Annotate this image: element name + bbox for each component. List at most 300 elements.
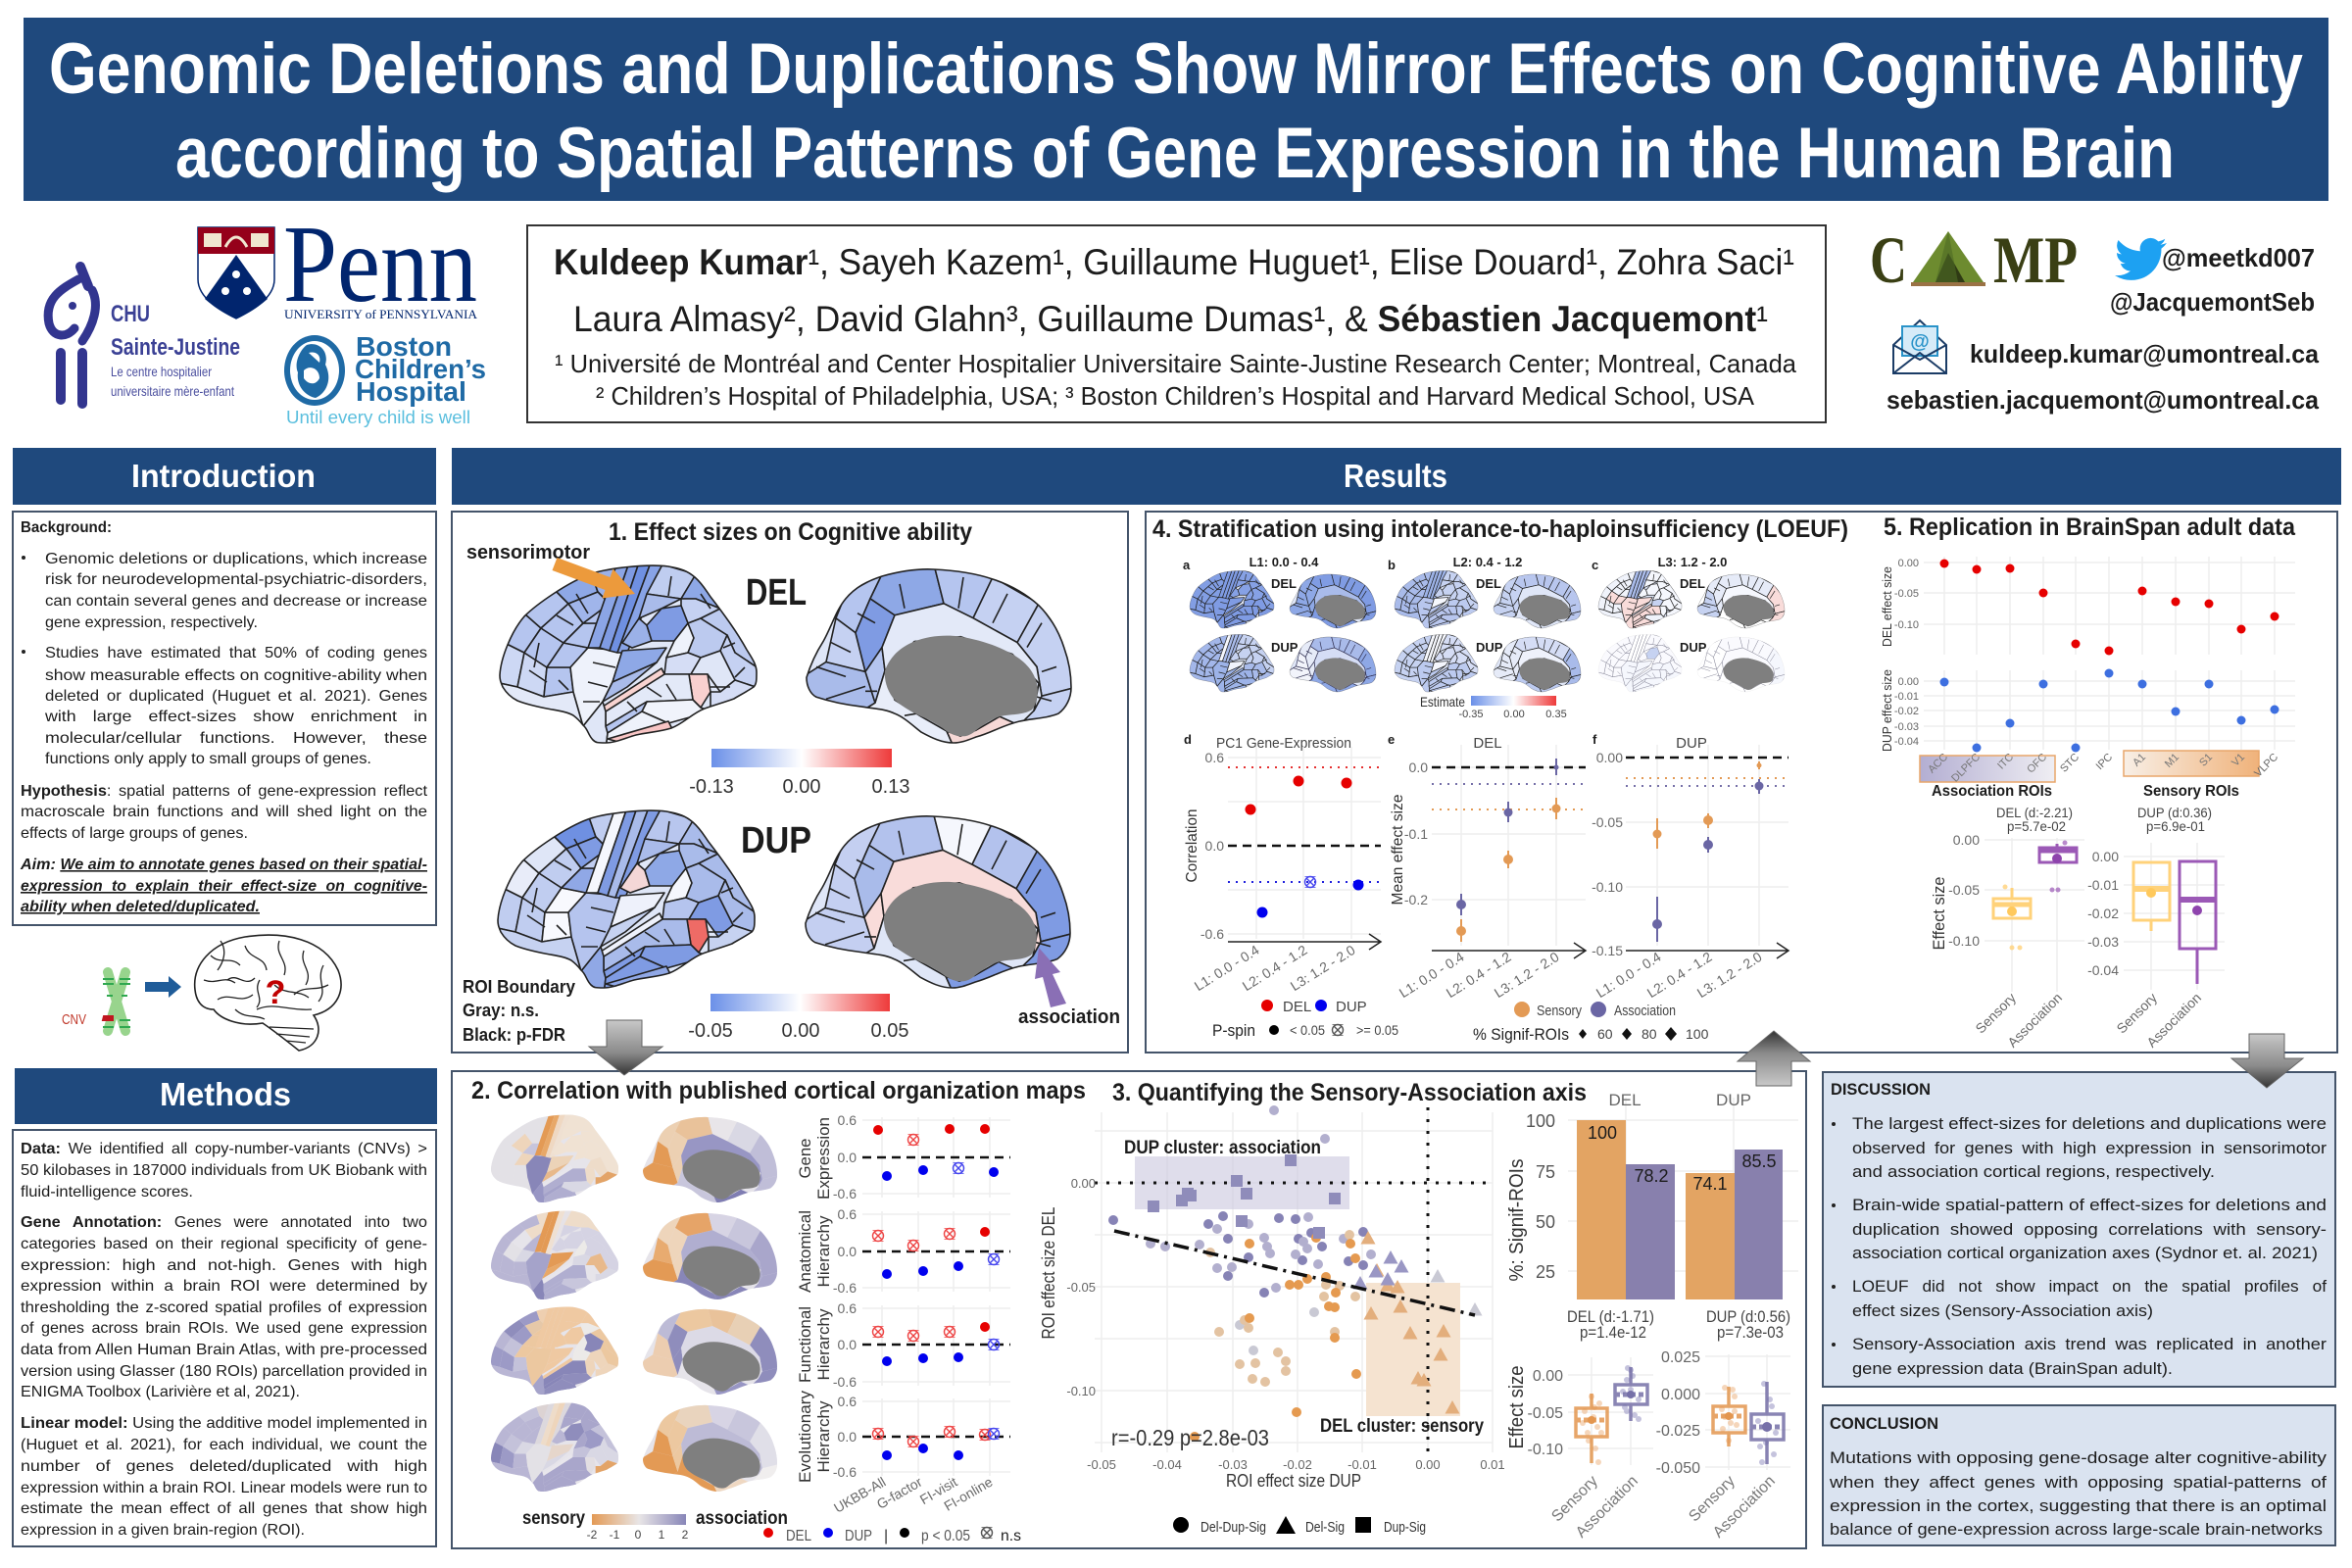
chart e: DEL mean effect: -0.2: [1404, 892, 1428, 907]
logo: Penn: UNIVERSITY of PENNSYLVANIA: [284, 307, 478, 321]
legend: Sensory/Association and % Signif-ROIs: [1473, 1002, 1709, 1044]
chart: anatomical hierarchy correlations: 0.0: [838, 1244, 857, 1259]
chart e: DEL mean effect: [1388, 732, 1586, 1001]
heading: Results: Results: [1344, 458, 1447, 494]
panel: conclusion: expression in the cortex, suggesting that there is an optimal: [1830, 1496, 2327, 1515]
arrow: panel 3 to panel 4: [1738, 1031, 1810, 1086]
legend: correlation charts: DEL: [786, 1528, 811, 1544]
chart d: PC1 gene-expression correlation: d: [1184, 732, 1192, 747]
colorbar: DEL: -0.13: [689, 776, 734, 798]
chart e: DEL mean effect: Mean effect size: [1390, 794, 1406, 906]
panel: introduction text: gene expression, respectively.: [45, 614, 258, 631]
chart f: DUP mean effect: -0.10: [1592, 879, 1623, 895]
brain grid: L3: c: [1592, 558, 1598, 572]
legend: Sensory/Association and % Signif-ROIs: Association: [1614, 1003, 1676, 1019]
chart f: DUP mean effect: L2: 0.4 - 1.2: [1644, 949, 1715, 1001]
x-axis: brain region labels: A1: [2131, 752, 2148, 769]
chart: functional hierarchy correlations: -0.6: [833, 1374, 857, 1390]
x-axis: brain region labels: ITC: [1995, 752, 2016, 772]
colorbar: DUP: [688, 994, 908, 1042]
panel: discussion: Brain-wide spatial-pattern of effect-sizes for deletions and: [1852, 1196, 2327, 1214]
boxplot: DEL sensory vs association: 0.00: [1533, 1368, 1563, 1385]
panel: introduction text: Studies have estimated that 50% of coding genes: [45, 645, 427, 662]
chart d: PC1 gene-expression correlation: Correlation: [1184, 809, 1200, 882]
bar chart: percent significant ROIs: 85.5: [1741, 1152, 1777, 1171]
highlight: Association ROIs: Association ROIs: [1932, 783, 2052, 800]
colorbar: Estimate: 0.35: [1545, 709, 1567, 720]
panel: methods text: expression in a given brain-region (ROI).: [21, 1522, 305, 1539]
chart f: DUP mean effect: [1592, 732, 1788, 1001]
chart: functional hierarchy correlations: Hierarchy: [814, 1308, 833, 1380]
legend: ROI boundary: Gray: n.s.: [463, 1001, 539, 1020]
boxplot: BrainSpan DUP: -0.04: [2087, 962, 2119, 978]
chart: anatomical hierarchy correlations: [796, 1206, 1010, 1296]
boxplot: BrainSpan DUP: -0.01: [2087, 877, 2119, 893]
icon: chromosome with CNV: [62, 972, 130, 1031]
panel: discussion: gene expression data (BrainSpan adult).: [1852, 1359, 2173, 1378]
colorbar: DUP: 0.05: [871, 1020, 908, 1042]
author box: Kuldeep Kumar¹, Sayeh Kazem¹, Guillaume Huguet¹, Elise Douard¹, Zohra Saci¹: [554, 242, 1794, 282]
chart: BrainSpan DUP effect size: -0.01: [1894, 691, 1919, 703]
boxplot: DEL sensory vs association: Effect size: [1506, 1366, 1528, 1448]
brain: DUP lateral: [493, 808, 762, 996]
icon: brain with question mark: ?: [266, 974, 285, 1011]
bar chart: percent significant ROIs: 74.1: [1692, 1174, 1728, 1194]
chart: BrainSpan DEL effect size: 0.00: [1898, 558, 1919, 569]
boxplot: BrainSpan DEL: Effect size: [1930, 876, 1948, 951]
panel: discussion: The largest effect-sizes for deletions and duplications were: [1852, 1114, 2327, 1133]
legend: point shapes: [1173, 1516, 1426, 1536]
axis labels: ROI effect size DUP: [1226, 1471, 1361, 1491]
chart: anatomical hierarchy correlations: Anatomical: [796, 1210, 814, 1293]
chart: BrainSpan DEL effect size: -0.05: [1894, 588, 1919, 600]
boxplot: DUP sensory vs association: 0.000: [1661, 1387, 1700, 1403]
chart: gene expression correlations: Expression: [814, 1117, 833, 1200]
x-axis: brain region labels: DLPFC: [1949, 752, 1983, 785]
cluster: DUP association: [1135, 1156, 1349, 1209]
heading: panel 5: 5. Replication in BrainSpan adult data: [1884, 514, 2296, 541]
panel: introduction text: risk for neurodevelopmental-psychiatric-disorders,: [45, 571, 427, 588]
panel: methods text: data from Allen Human Brain Atlas, with pre-processed: [21, 1342, 427, 1358]
points: light orange circles: [1205, 1230, 1360, 1387]
brain grid: L1: L1: 0.0 - 0.4: [1250, 555, 1319, 569]
legend: correlation charts: DUP: [845, 1528, 872, 1544]
brain grid: L1: DUP: [1271, 640, 1298, 655]
boxplot: DUP sensory vs association: DUP (d:0.56): [1706, 1307, 1790, 1326]
chart d: PC1 gene-expression correlation: [1184, 732, 1381, 994]
panel: conclusion: when they affect genes with opposing spatial-patterns of: [1829, 1473, 2327, 1492]
chart d: PC1 gene-expression correlation: PC1 Gene-Expression: [1216, 735, 1351, 752]
chart f: DUP mean effect: L1: 0.0 - 0.4: [1593, 949, 1664, 1001]
heading: panel 2: 2. Correlation with published cortical organization maps: [471, 1077, 1086, 1104]
legend: Sensory/Association and % Signif-ROIs: 60: [1597, 1026, 1613, 1042]
panel: introduction text: effects of large groups of genes.: [21, 825, 248, 842]
legend: Sensory/Association and % Signif-ROIs: 100: [1686, 1026, 1709, 1042]
author box: ² Children’s Hospital of Philadelphia, USA; ³ Boston Children’s Hospital and Harvard Medical School, USA: [596, 381, 1755, 411]
logo: CHU Sainte-Justine: [48, 267, 240, 404]
logo: Boston Children's Hospital: Boston: [356, 331, 452, 362]
bar chart: percent significant ROIs: 100: [1526, 1111, 1555, 1131]
boxplot: DEL sensory vs association: Sensory: [1548, 1473, 1601, 1525]
bar chart: percent significant ROIs: 100: [1588, 1123, 1617, 1143]
colorbar: DUP: 0.00: [782, 1020, 819, 1042]
boxplot: DUP sensory vs association: 0.025: [1661, 1349, 1700, 1366]
heading: Introduction: Introduction: [131, 458, 316, 494]
brain grid: L3: DUP: [1680, 640, 1707, 655]
boxplot: BrainSpan DEL: Sensory: [1972, 990, 2019, 1036]
heading: Methods: Methods: [160, 1076, 291, 1112]
legend: Sensory/Association and % Signif-ROIs: Sensory: [1537, 1003, 1582, 1019]
chart d: PC1 gene-expression correlation: L1: 0.0 - 0.4: [1192, 942, 1262, 994]
boxplot: BrainSpan DEL: Association: [2004, 990, 2065, 1051]
chart: evolutionary hierarchy correlations: UKBB-All: [831, 1474, 888, 1516]
boxplot: DUP sensory vs association: Association: [1710, 1473, 1779, 1542]
panel: methods text: (Huguet et al. 2021), for each individual, we count the: [21, 1437, 427, 1453]
panel: introduction text: Hypothesis: spatial patterns of gene-expression reflect: [21, 783, 428, 800]
legend: ROI boundary: Black: p-FDR: [463, 1025, 565, 1045]
panel: discussion: observed for genes with high expression in sensorimotor: [1852, 1139, 2327, 1157]
brain grid: L2: L2: 0.4 - 1.2: [1453, 555, 1522, 569]
axis labels: -0.03: [1218, 1457, 1248, 1472]
chart: BrainSpan DEL effect size: -0.10: [1894, 619, 1919, 631]
brains: functional hierarchy: [489, 1305, 780, 1398]
panel: introduction text: molecular/cellular functions. However, these: [45, 730, 427, 747]
points: orange circles: [1190, 1233, 1361, 1442]
x-axis: brain region labels: M1: [2163, 752, 2181, 770]
panel: introduction text: show measurable effects on cognitive-ability when: [45, 667, 427, 684]
panel: discussion: Sensory-Association axis trend was replicated in another: [1852, 1335, 2327, 1353]
panel: introduction text: Aim: We aim to annotate genes based on their spatial-: [20, 857, 427, 873]
legend: point shapes: Del-Dup-Sig: [1200, 1519, 1266, 1536]
axis labels: -0.02: [1283, 1457, 1312, 1472]
bar chart: percent significant ROIs: 25: [1536, 1262, 1555, 1282]
colorbar: Estimate: -0.35: [1458, 709, 1484, 720]
x-axis: brain region labels: IPC: [2094, 752, 2115, 772]
boxplot: DEL sensory vs association: [1506, 1307, 1654, 1542]
chart: evolutionary hierarchy correlations: FI-visit: [917, 1474, 960, 1507]
legend: correlation charts: p < 0.05: [921, 1528, 970, 1544]
boxplot: BrainSpan DEL: p=5.7e-02: [2007, 818, 2066, 834]
x-axis: brain region labels: STC: [2058, 752, 2082, 775]
panel: methods text: categories based on their regional specificity of gene-: [21, 1236, 427, 1252]
chart: gene expression correlations: [796, 1112, 1010, 1201]
legend: DEL/DUP and P-spin: >= 0.05: [1356, 1022, 1398, 1038]
label: sensorimotor: sensorimotor: [466, 542, 590, 564]
brains: gene expression: [489, 1113, 780, 1206]
x-axis: brain region labels: VLPC: [2252, 752, 2280, 779]
icon: envelope: @: [1910, 331, 1930, 353]
boxplot: BrainSpan DEL: -0.10: [1948, 933, 1980, 949]
points: purple triangles: [1352, 1250, 1409, 1290]
panel: methods text: Gene Annotation: Genes were annotated into two: [21, 1214, 427, 1231]
boxplot: BrainSpan DUP: DUP (d:0.36): [2137, 805, 2212, 820]
legend: sensory-association colorbar: [522, 1508, 788, 1542]
legend: sensory-association colorbar: -1: [610, 1528, 620, 1542]
brain: DEL lateral: [495, 563, 764, 751]
panel: introduction text: [13, 512, 436, 925]
boxplot: DEL sensory vs association: p=1.4e-12: [1580, 1323, 1646, 1342]
points: purple circles: [1108, 1211, 1368, 1298]
panel: introduction text: macroscale brain functions and will shed light on the: [21, 804, 427, 820]
brain grid: L1: a: [1183, 558, 1191, 572]
label: association: association: [1018, 1006, 1120, 1028]
colorbar: DUP: -0.05: [688, 1020, 733, 1042]
title banner: [24, 18, 2328, 201]
x-axis: brain region labels: V1: [2230, 752, 2247, 769]
boxplot: DUP sensory vs association: -0.050: [1656, 1460, 1700, 1477]
chart d: PC1 gene-expression correlation: 0.0: [1205, 838, 1224, 854]
chart d: PC1 gene-expression correlation: L3: 1.2 - 2.0: [1288, 942, 1358, 994]
label: DEL cluster: DEL cluster: sensory: [1320, 1416, 1484, 1437]
boxplot: BrainSpan DUP: Sensory: [2113, 990, 2160, 1036]
boxplot: DEL sensory vs association: -0.05: [1528, 1405, 1563, 1422]
highlight: Sensory ROIs: Sensory ROIs: [2143, 783, 2239, 800]
logo: CAMP tent: C: [1870, 222, 1907, 297]
panel: methods text: expression within a brain ROI. Linear models were run to: [21, 1480, 427, 1496]
panel: introduction text: expression to explain their effect-size on cognitive-: [21, 878, 427, 895]
arrow: CNV to brain: [145, 976, 181, 998]
panel: methods text: fluid-intelligence scores.: [21, 1184, 193, 1200]
panel: introduction text: deleted or duplicated (Huguet et al. 2021). Genes: [45, 688, 427, 705]
brains: evolutionary hierarchy: [489, 1401, 780, 1495]
legend: sensory-association colorbar: -2: [587, 1528, 598, 1542]
legend: DEL/DUP and P-spin: [1212, 999, 1398, 1040]
panel: discussion: and association cortical regions, respectively.: [1852, 1162, 2215, 1181]
boxplot: BrainSpan DUP: p=6.9e-01: [2146, 818, 2205, 834]
boxplot: BrainSpan DUP: 0.00: [2092, 849, 2119, 864]
chart e: DEL mean effect: 0.0: [1409, 760, 1428, 775]
legend: DEL/DUP and P-spin: < 0.05: [1290, 1022, 1325, 1038]
boxplot: DUP sensory vs association: Sensory: [1686, 1473, 1739, 1525]
brain: DUP medial: [801, 811, 1075, 992]
brain: DEL medial: [802, 564, 1076, 747]
chart: BrainSpan DUP effect size: DUP effect size: [1880, 669, 1894, 752]
bar chart: percent significant ROIs: 75: [1536, 1162, 1555, 1182]
brain grid: L2: DUP: [1476, 640, 1503, 655]
chart: gene expression correlations: -0.6: [833, 1186, 857, 1201]
brains: anatomical hierarchy: [489, 1209, 780, 1303]
heading: 1. Effect sizes on Cognitive ability: [609, 518, 972, 546]
legend: sensory-association colorbar: sensory: [522, 1508, 585, 1529]
axis labels: -0.01: [1348, 1457, 1377, 1472]
boxplot: DEL sensory vs association: -0.10: [1528, 1442, 1563, 1458]
panel: introduction text: can contain several genes and decrease or increase: [45, 593, 427, 610]
axis labels: -0.05: [1087, 1457, 1116, 1472]
x-axis: brain region labels: ACC: [1926, 752, 1950, 776]
panel: introduction text: Genomic deletions or duplications, which increase: [45, 551, 427, 567]
trend line: [1114, 1231, 1475, 1315]
x-axis: brain region labels: S1: [2197, 752, 2215, 769]
legend: sensory-association colorbar: 2: [682, 1528, 689, 1542]
panel: conclusion: CONCLUSION: [1830, 1414, 1938, 1433]
panel: methods text: 50 kilobases in 187000 individuals from UK Biobank with: [21, 1162, 427, 1179]
chart e: DEL mean effect: L3: 1.2 - 2.0: [1492, 949, 1562, 1001]
author box: [527, 225, 1826, 422]
logo: Penn: [198, 204, 478, 325]
panel 1: effect sizes on cognitive ability: [452, 512, 1128, 1053]
legend: correlation charts: [763, 1527, 1021, 1544]
brain grid: L2: [1388, 555, 1583, 695]
bar chart: percent significant ROIs: 78.2: [1634, 1166, 1669, 1186]
axis labels: 0.00: [1415, 1457, 1441, 1472]
brain grid: L3: L3: 1.2 - 2.0: [1658, 555, 1727, 569]
chart d: PC1 gene-expression correlation: -0.6: [1200, 926, 1224, 942]
chart f: DUP mean effect: DUP: [1676, 735, 1707, 752]
cluster: DEL sensory: [1366, 1283, 1460, 1416]
label: correlation statistic: r=-0.29 p=2.8e-03: [1111, 1425, 1269, 1450]
legend: ROI boundary: [463, 977, 575, 1045]
x-axis: brain region labels: OFC: [2025, 752, 2049, 776]
icon: brain with question mark: [195, 935, 341, 1051]
chart: evolutionary hierarchy correlations: Hierarchy: [814, 1400, 833, 1472]
colorbar: Estimate: 0.00: [1503, 709, 1525, 720]
boxplot: BrainSpan DEL: [1930, 805, 2084, 1051]
boxplot: BrainSpan DEL: -0.05: [1948, 882, 1980, 898]
legend: sensory-association colorbar: association: [696, 1508, 788, 1529]
axis labels: 0.00: [1071, 1176, 1096, 1191]
logo: CHU Sainte-Justine: Le centre hospitalier: [111, 364, 212, 379]
arrow: sensorimotor: [553, 558, 635, 598]
panel: methods text: version using Glasser (180 ROIs) parcellation provided in: [21, 1363, 427, 1380]
chart: BrainSpan DEL effect size: DEL effect size: [1880, 566, 1894, 647]
panel: introduction text: ability when deleted/duplicated.: [21, 899, 260, 915]
heading: Introduction: [13, 448, 436, 505]
colorbar: DEL: [689, 749, 909, 798]
axis labels: ROI effect size DEL: [1039, 1207, 1058, 1339]
bar chart: percent significant ROIs: DEL: [1608, 1091, 1642, 1109]
legend: Sensory/Association and % Signif-ROIs: 80: [1642, 1026, 1657, 1042]
chart: evolutionary hierarchy correlations: Evolutionary: [796, 1391, 814, 1483]
label: DEL: DEL: [746, 572, 807, 613]
panel: methods text: Linear model: Using the additive model implemented in: [21, 1415, 427, 1432]
author box: ¹ Université de Montréal and Center Hospitalier Universitaire Sainte-Justine Research Center; Montreal, Canada: [555, 349, 1797, 378]
chart: evolutionary hierarchy correlations: 0.6: [838, 1394, 857, 1409]
panel: discussion: association cortical organization axes (Sydnor et. al. 2021): [1852, 1244, 2318, 1262]
chart f: DUP mean effect: -0.05: [1592, 814, 1623, 830]
arrow: panel 5 to discussion: [2231, 1034, 2303, 1088]
chart: functional hierarchy correlations: 0.6: [838, 1300, 857, 1316]
logo: CHU Sainte-Justine: Sainte-Justine: [111, 334, 240, 361]
points: gray triangles: [1431, 1269, 1482, 1315]
legend: DEL/DUP and P-spin: DUP: [1336, 999, 1367, 1015]
highlight: Sensory ROIs: [2124, 751, 2259, 800]
panel: discussion: LOEUF did not show impact on the spatial profiles of: [1852, 1277, 2327, 1296]
panel: conclusion: balance of gene-expression across large-scale brain-networks: [1830, 1520, 2323, 1539]
logo: CHU Sainte-Justine: universitaire mère-enfant: [111, 383, 234, 399]
panel: introduction text: functions only apply to small groups of genes.: [45, 751, 371, 767]
chart e: DEL mean effect: DEL: [1473, 735, 1502, 752]
panel: introduction text: Background:: [21, 519, 112, 536]
contact handles: sebastien.jacquemont@umontreal.ca: [1886, 385, 2320, 415]
chart f: DUP mean effect: f: [1592, 732, 1597, 747]
bar chart: percent significant ROIs: 50: [1536, 1212, 1555, 1232]
brain grid: L1: [1183, 555, 1378, 695]
points: orange triangles: [1360, 1231, 1460, 1413]
panel: methods text: expression within a brain ROI were determined by: [21, 1278, 427, 1295]
boxplot: DUP sensory vs association: -0.025: [1656, 1423, 1700, 1440]
chart f: DUP mean effect: L3: 1.2 - 2.0: [1694, 949, 1765, 1001]
colorbar: DEL: 0.00: [783, 776, 820, 798]
legend: sensory-association colorbar: 1: [659, 1528, 665, 1542]
chart d: PC1 gene-expression correlation: 0.6: [1205, 750, 1224, 765]
legend: DEL/DUP and P-spin: P-spin: [1212, 1021, 1255, 1040]
boxplot: DEL sensory vs association: Association: [1573, 1473, 1642, 1542]
chart: BrainSpan DUP effect size: -0.02: [1894, 706, 1919, 717]
chart: anatomical hierarchy correlations: 0.6: [838, 1206, 857, 1222]
chart: evolutionary hierarchy correlations: 0.0: [838, 1429, 857, 1445]
highlight: Association ROIs: [1920, 756, 2055, 800]
logo: Boston Children's Hospital: Children’s: [355, 354, 486, 384]
panel 4 and 5: LOEUF stratification and BrainSpan replication: [1146, 512, 2337, 1053]
boxplot: BrainSpan DUP: -0.03: [2087, 934, 2119, 950]
panel: methods text: [13, 1130, 436, 1546]
logo: Penn: Penn: [283, 204, 477, 325]
axis labels: 0.01: [1480, 1457, 1505, 1472]
panel: conclusion: Mutations with opposing gene-dosage alter cognitive-ability: [1830, 1448, 2328, 1467]
logo: CAMP tent: MP: [1993, 222, 2078, 297]
heading: Results: [452, 448, 2341, 505]
logo: CAMP tent: [1870, 222, 2078, 297]
legend: ROI boundary: ROI Boundary: [463, 977, 575, 997]
bar chart: percent significant ROIs: DUP: [1716, 1091, 1751, 1109]
heading: panel 4: 4. Stratification using intolerance-to-haploinsufficiency (LOEUF): [1152, 515, 1848, 543]
panel: methods text: of genes across brain ROIs. We used gene expression: [21, 1320, 427, 1337]
label: DUP: DUP: [741, 820, 811, 861]
legend: correlation charts: |: [884, 1528, 888, 1544]
bar chart: percent significant ROIs: %: Signif-ROIs: [1506, 1158, 1528, 1282]
legend: sensory-association colorbar: 0: [635, 1528, 642, 1542]
legend: point shapes: Del-Sig: [1305, 1519, 1345, 1536]
brain grid: L1: DEL: [1271, 576, 1297, 591]
boxplot: BrainSpan DUP: [2087, 805, 2225, 1051]
heading: Methods: [15, 1068, 437, 1124]
boxplot: BrainSpan DEL: 0.00: [1953, 832, 1980, 848]
panel: methods text: Data: We identified all copy-number-variants (CNVs) >: [21, 1141, 427, 1157]
contact handles: @JacquemontSeb: [2110, 287, 2315, 317]
chart e: DEL mean effect: L1: 0.0 - 0.4: [1396, 949, 1467, 1001]
chart: evolutionary hierarchy correlations: -0.6: [833, 1464, 857, 1480]
chart f: DUP mean effect: 0.00: [1596, 750, 1623, 765]
brain grid: L3: DEL: [1680, 576, 1705, 591]
icon: envelope: [1893, 320, 1946, 373]
panel: methods text: expression: high and not-high. Genes with high: [21, 1257, 427, 1274]
chart: sensory-association scatter: [1039, 1105, 1505, 1536]
contact handles: [1886, 243, 2320, 415]
contact handles: @meetkd007: [2162, 243, 2315, 272]
chart: functional hierarchy correlations: Functional: [796, 1306, 814, 1383]
chart: gene expression correlations: Gene: [796, 1139, 814, 1178]
chart: functional hierarchy correlations: 0.0: [838, 1337, 857, 1352]
colorbar: Estimate: [1420, 694, 1567, 720]
chart e: DEL mean effect: L2: 0.4 - 1.2: [1444, 949, 1514, 1001]
panel: methods text: ENIGMA Toolbox (Larivière et al, 2021).: [21, 1384, 300, 1400]
chart: anatomical hierarchy correlations: Hierarchy: [814, 1215, 833, 1288]
legend: point shapes: Dup-Sig: [1384, 1519, 1426, 1536]
heading: panel 3: 3. Quantifying the Sensory-Association axis: [1112, 1079, 1587, 1106]
chart: evolutionary hierarchy correlations: G-factor: [874, 1474, 925, 1512]
chart: BrainSpan DUP effect size: [1880, 668, 2295, 753]
legend: Sensory/Association and % Signif-ROIs: % Signif-ROIs: [1473, 1025, 1569, 1044]
colorbar: DEL: 0.13: [872, 776, 909, 798]
chart: evolutionary hierarchy correlations: [796, 1391, 1010, 1516]
chart e: DEL mean effect: e: [1388, 732, 1395, 747]
axis labels: -0.05: [1066, 1280, 1096, 1295]
boxplot: DUP sensory vs association: [1656, 1307, 1790, 1542]
panel: methods text: estimate the mean effect of all genes that show high: [21, 1500, 427, 1517]
icon: twitter bird: [2115, 238, 2167, 280]
panel: discussion: duplication showed opposing correlations with sensory-: [1852, 1220, 2327, 1239]
chart: BrainSpan DEL effect size: [1880, 557, 2295, 655]
